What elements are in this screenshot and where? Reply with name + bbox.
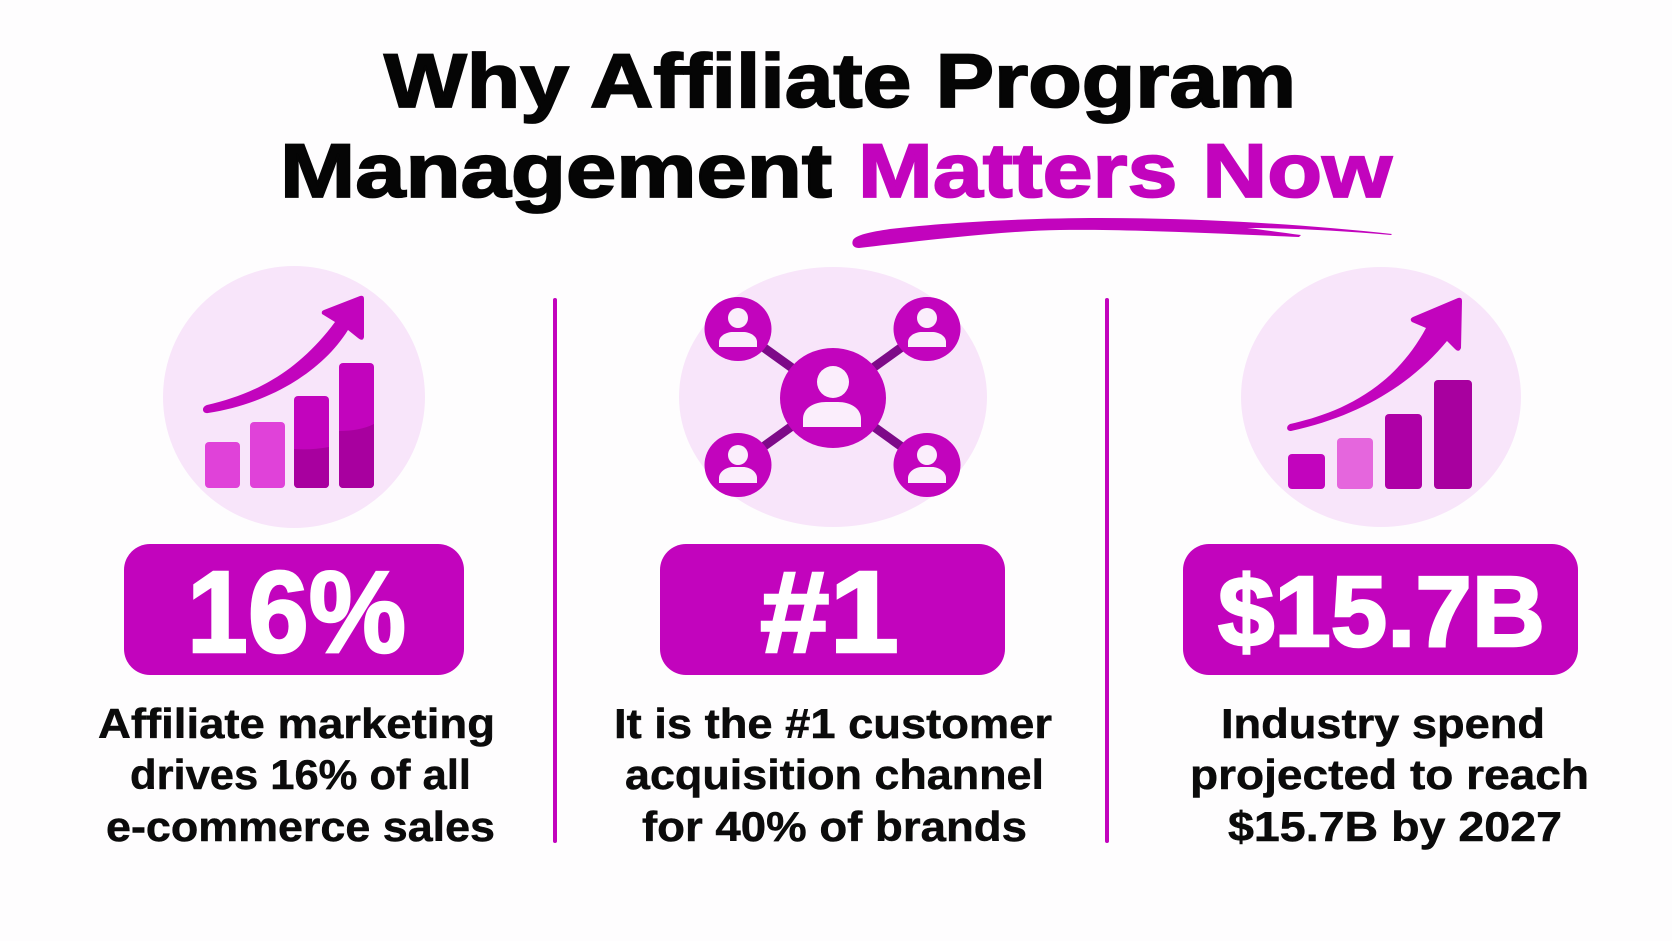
description: 16%: Affiliate marketing [98,700,495,747]
description: 16%: drives 16% of all [130,751,471,798]
divider [1105,298,1109,843]
stat pill: $15.7B: $15.7B [1218,556,1545,668]
description: #1 [614,700,1052,850]
title underline swoosh [852,218,1392,248]
stat pill: $15.7B [1183,544,1578,675]
panel: $15.7B stat [1183,267,1589,850]
description: #1: for 40% of brands [642,803,1027,850]
panel: #1 stat [614,267,1052,850]
description: #1: acquisition channel [625,751,1044,798]
title [280,39,1393,214]
description: $15.7B: Industry spend [1221,700,1545,747]
title: Management [280,129,832,214]
panel: 16% stat [98,266,495,850]
description: $15.7B [1190,700,1589,850]
stat pill: #1: #1 [760,547,899,677]
description: $15.7B: projected to reach [1190,751,1589,798]
description: $15.7B: $15.7B by 2027 [1228,803,1562,850]
stat pill: 16% [124,544,464,677]
description: 16% [98,700,495,850]
stat pill: #1 [660,544,1005,677]
title: Matters Now [858,129,1393,214]
divider [553,298,557,843]
title: Why Affiliate Program [384,39,1296,124]
icon: bar chart with rising arrow [1241,267,1521,527]
icon: affiliate network [679,267,987,527]
icon: bar chart with rising arrow [163,266,425,528]
description: #1: It is the #1 customer [614,700,1052,747]
stat pill: 16%: 16% [187,547,406,677]
description: 16%: e-commerce sales [106,803,495,850]
